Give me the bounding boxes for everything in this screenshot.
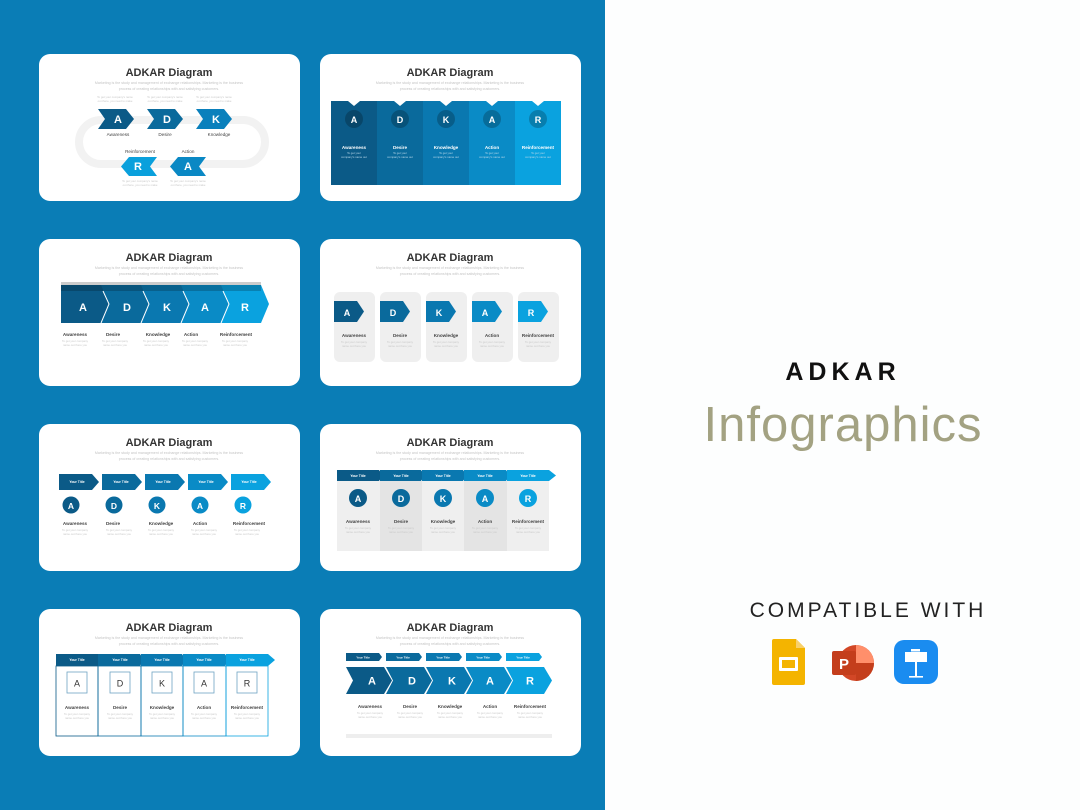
card 5: title arrows with circles: Desire	[106, 521, 120, 526]
card 3: chevron band: D	[123, 302, 131, 314]
card 3: chevron band: To get your company	[182, 339, 209, 343]
card 5: title arrows with circles: A	[197, 501, 203, 511]
card 7: outlined boxes: name out there you	[65, 716, 89, 720]
card 6: header band with gray columns: To get your company	[345, 526, 372, 530]
card 8: big chevrons with title tags: Your Title	[436, 656, 450, 660]
card 4: tiles: ADKAR Diagram	[407, 252, 494, 264]
card 7: outlined boxes: Your Title	[239, 658, 255, 662]
card 6: header band with gray columns: To get your company	[472, 526, 499, 530]
card 4: tiles: name out there you	[526, 344, 550, 348]
card 5: title arrows with circles: R	[240, 501, 246, 511]
card 3: chevron band: To get your company	[62, 339, 89, 343]
card 4: tiles: process of creating relationships with and satisfying customers.	[400, 272, 500, 276]
card 8: big chevrons with title tags	[320, 609, 581, 756]
card 3: chevron band: Knowledge	[146, 332, 171, 337]
card 7: outlined boxes: Awareness	[65, 705, 90, 710]
card 3: chevron band: Awareness	[63, 332, 88, 337]
card 6: header band with gray columns: Knowledge	[431, 519, 456, 524]
card 6: header band with gray columns: name out there you	[346, 530, 370, 534]
card 3: chevron band: To get your company	[143, 339, 170, 343]
card 2: column blocks: company's name out	[479, 155, 505, 159]
card 5: title arrows with circles: name out there you	[107, 532, 131, 536]
card 2: column blocks: process of creating relationships with and satisfying customers.	[400, 87, 500, 91]
card 7: outlined boxes: Knowledge	[150, 705, 175, 710]
card 2: column blocks: ADKAR Diagram	[407, 67, 494, 79]
card 2: column blocks: To get your	[439, 151, 453, 155]
card 8: big chevrons with title tags: Your Title	[356, 656, 370, 660]
card 6: header band with gray columns	[320, 424, 581, 571]
card 4: tiles: name out there you	[388, 344, 412, 348]
card 7: outlined boxes: ADKAR Diagram	[126, 622, 213, 634]
card 2: column blocks: K	[443, 115, 450, 125]
card 8: big chevrons with title tags: name out there you	[398, 715, 422, 719]
card 1: loop diagram: K	[212, 114, 220, 126]
card 6: header band with gray columns: Your Title	[350, 474, 366, 478]
card 1: loop diagram: To get your company's name	[170, 179, 206, 183]
card 3: chevron band: Action	[184, 332, 198, 337]
heading: ADKAR: ADKAR	[785, 358, 901, 386]
card 7: outlined boxes: R	[244, 678, 251, 688]
card 3: chevron band: K	[163, 302, 171, 314]
card 5: title arrows with circles: To get your company	[62, 528, 89, 532]
card 8: big chevrons with title tags: Awareness	[358, 704, 383, 709]
card 5: title arrows with circles: process of creating relationships with and satisfying customers.	[119, 457, 219, 461]
card 6: header band with gray columns: A	[482, 494, 489, 504]
card 5: title arrows with circles	[39, 424, 300, 571]
card 1: loop diagram: out there, you need to make	[98, 99, 133, 103]
card 8: big chevrons with title tags: name out there you	[518, 715, 542, 719]
card 4: tiles: name out there you	[480, 344, 504, 348]
card 4: tiles: Reinforcement	[522, 333, 555, 338]
card 1: loop diagram: D	[163, 114, 171, 126]
icon: google slides	[772, 639, 805, 685]
card 1: loop diagram: out there, you need to make	[197, 99, 232, 103]
card 6: header band with gray columns: name out there you	[516, 530, 540, 534]
card 5: title arrows with circles: To get your company	[191, 528, 218, 532]
card 7: outlined boxes	[39, 609, 300, 756]
card 5: title arrows with circles: Action	[193, 521, 207, 526]
card 1: loop diagram: Awareness	[107, 132, 130, 137]
card 5: title arrows with circles: Knowledge	[149, 521, 174, 526]
card 7: outlined boxes: name out there you	[235, 716, 259, 720]
card 2: column blocks: company's name out	[341, 155, 367, 159]
card 3: chevron band: R	[241, 302, 249, 314]
card 2: column blocks: R	[535, 115, 542, 125]
card 8: big chevrons with title tags: To get your company	[477, 711, 504, 715]
card 3: chevron band: name out there you	[223, 343, 247, 347]
card 7: outlined boxes: Your Title	[69, 658, 85, 662]
card 2: column blocks: Reinforcement	[522, 145, 555, 150]
card 5: title arrows with circles: To get your company	[234, 528, 261, 532]
card 3: chevron band: Desire	[106, 332, 120, 337]
card 4: tiles: Action	[485, 333, 499, 338]
card 7: outlined boxes: Your Title	[196, 658, 212, 662]
card 2: column blocks: To get your	[531, 151, 545, 155]
card 6: header band with gray columns: Awareness	[346, 519, 371, 524]
card 8: big chevrons with title tags: ADKAR Diagram	[407, 622, 494, 634]
card 7: outlined boxes: To get your company	[234, 712, 261, 716]
card 4: tiles: To get your company	[387, 340, 414, 344]
card 3: chevron band: Marketing is the study and management of exchange relationships. Marketing is the business	[95, 266, 243, 270]
card 5: title arrows with circles: Your Title	[198, 480, 214, 484]
card 2: column blocks: Knowledge	[434, 145, 459, 150]
card 4: tiles: To get your company	[433, 340, 460, 344]
card 4: tiles: K	[436, 308, 443, 318]
card 2: column blocks: Desire	[393, 145, 407, 150]
card 7: outlined boxes: To get your company	[107, 712, 134, 716]
card 4: tiles	[320, 239, 581, 386]
card 3: chevron band: Reinforcement	[220, 332, 253, 337]
card 2: column blocks: Awareness	[342, 145, 367, 150]
card 7: outlined boxes: Reinforcement	[231, 705, 264, 710]
card 7: outlined boxes: Desire	[113, 705, 127, 710]
card 8: big chevrons with title tags: To get your company	[397, 711, 424, 715]
card 1: loop diagram	[39, 54, 300, 201]
card 6: header band with gray columns: Desire	[394, 519, 408, 524]
card 2: column blocks: D	[397, 115, 404, 125]
card 5: title arrows with circles: To get your company	[148, 528, 175, 532]
icon: powerpoint	[832, 645, 874, 681]
card 8: big chevrons with title tags: Marketing is the study and management of exchange relationships. Marketing is the business	[376, 636, 524, 640]
card 5: title arrows with circles: Your Title	[113, 480, 129, 484]
card 3: chevron band: To get your company	[222, 339, 249, 343]
card 4: tiles: To get your company	[341, 340, 368, 344]
card 8: big chevrons with title tags: Your Title	[516, 656, 530, 660]
card 8: big chevrons with title tags: Action	[483, 704, 497, 709]
card 5: title arrows with circles: name out there you	[63, 532, 87, 536]
card 8: big chevrons with title tags: To get your company	[437, 711, 464, 715]
card 1: loop diagram: process of creating relationships with and satisfying customers.	[119, 87, 219, 91]
card 6: header band with gray columns: Action	[478, 519, 492, 524]
card 8: big chevrons with title tags: process of creating relationships with and satisfying customers.	[400, 642, 500, 646]
card 1: loop diagram: Action	[182, 149, 195, 154]
card 4: tiles: Awareness	[342, 333, 367, 338]
card 1: loop diagram: To get your company's name	[196, 95, 232, 99]
card 1: loop diagram: out there, you need to make	[148, 99, 183, 103]
card 3: chevron band: To get your company	[102, 339, 129, 343]
card 7: outlined boxes: process of creating relationships with and satisfying customers.	[119, 642, 219, 646]
card 8: big chevrons with title tags: K	[448, 676, 456, 688]
card 7: outlined boxes: Action	[197, 705, 211, 710]
card 6: header band with gray columns: name out there you	[431, 530, 455, 534]
card 5: title arrows with circles: ADKAR Diagram	[126, 437, 213, 449]
card 4: tiles: name out there you	[342, 344, 366, 348]
card 1: loop diagram: R	[134, 161, 142, 173]
card 7: outlined boxes: name out there you	[108, 716, 132, 720]
card 1: loop diagram: To get your company's name	[97, 95, 133, 99]
heading: Infographics: Infographics	[704, 398, 982, 452]
card 1: loop diagram: Knowledge	[208, 132, 231, 137]
card 6: header band with gray columns: To get your company	[515, 526, 542, 530]
panel: blue background	[0, 0, 605, 810]
card 6: header band with gray columns: name out there you	[473, 530, 497, 534]
card 1: loop diagram: ADKAR Diagram	[126, 67, 213, 79]
card 2: column blocks: Marketing is the study and management of exchange relationships. Marketing is the business	[376, 81, 524, 85]
card 6: header band with gray columns: name out there you	[389, 530, 413, 534]
card 8: big chevrons with title tags: Desire	[403, 704, 417, 709]
card 7: outlined boxes: name out there you	[150, 716, 174, 720]
card 2: column blocks: To get your	[347, 151, 361, 155]
card 3: chevron band: A	[201, 302, 209, 314]
card 2: column blocks: A	[351, 115, 358, 125]
card 6: header band with gray columns: process of creating relationships with and satisfying customers.	[400, 457, 500, 461]
card 5: title arrows with circles: name out there you	[192, 532, 216, 536]
card 7: outlined boxes: To get your company	[191, 712, 218, 716]
card 6: header band with gray columns: A	[355, 494, 362, 504]
card 4: tiles: Knowledge	[434, 333, 459, 338]
card 5: title arrows with circles: Reinforcement	[233, 521, 266, 526]
card 8: big chevrons with title tags: Your Title	[476, 656, 490, 660]
card 4: tiles: To get your company	[479, 340, 506, 344]
card 7: outlined boxes: K	[159, 678, 165, 688]
card 7: outlined boxes: A	[74, 678, 80, 688]
card 6: header band with gray columns: Reinforcement	[512, 519, 545, 524]
card 2: column blocks: A	[489, 115, 496, 125]
icon: powerpoint: P	[839, 656, 849, 673]
card 8: big chevrons with title tags: A	[486, 676, 494, 688]
card 3: chevron band: name out there you	[183, 343, 207, 347]
card 5: title arrows with circles: Your Title	[155, 480, 171, 484]
card 6: header band with gray columns: Marketing is the study and management of exchange relationships. Marketing is the business	[376, 451, 524, 455]
card 8: big chevrons with title tags: R	[526, 676, 534, 688]
card 8: big chevrons with title tags: To get your company	[357, 711, 384, 715]
card 3: chevron band: ADKAR Diagram	[126, 252, 213, 264]
card 4: tiles: To get your company	[525, 340, 552, 344]
card 7: outlined boxes: To get your company	[64, 712, 91, 716]
card 2: column blocks	[320, 54, 581, 201]
card 3: chevron band: name out there you	[144, 343, 168, 347]
card 2: column blocks: To get your	[485, 151, 499, 155]
card 5: title arrows with circles: K	[154, 501, 161, 511]
card 2: column blocks: To get your	[393, 151, 407, 155]
card 1: loop diagram: A	[184, 161, 192, 173]
card 7: outlined boxes: Your Title	[112, 658, 128, 662]
text: compatible with: COMPATIBLE WITH	[750, 599, 986, 622]
card 4: tiles: Marketing is the study and management of exchange relationships. Marketing is the business	[376, 266, 524, 270]
card 1: loop diagram: Desire	[158, 132, 172, 137]
card 8: big chevrons with title tags: name out there you	[358, 715, 382, 719]
card 2: column blocks: company's name out	[433, 155, 459, 159]
card 4: tiles: A	[344, 308, 351, 318]
card 6: header band with gray columns: Your Title	[477, 474, 493, 478]
card 4: tiles: R	[528, 308, 535, 318]
card 7: outlined boxes: To get your company	[149, 712, 176, 716]
card 3: chevron band	[39, 239, 300, 386]
card 3: chevron band: name out there you	[63, 343, 87, 347]
card 2: column blocks: Action	[485, 145, 499, 150]
card 7: outlined boxes: name out there you	[192, 716, 216, 720]
card 1: loop diagram: Marketing is the study and management of exchange relationships. Marketing is the business	[95, 81, 243, 85]
card 4: tiles: Desire	[393, 333, 407, 338]
card 4: tiles: name out there you	[434, 344, 458, 348]
card 5: title arrows with circles: Your Title	[69, 480, 85, 484]
card 6: header band with gray columns: D	[398, 494, 405, 504]
card 7: outlined boxes: D	[117, 678, 124, 688]
card 3: chevron band: process of creating relationships with and satisfying customers.	[119, 272, 219, 276]
card 1: loop diagram: Reinforcement	[125, 149, 156, 154]
card 7: outlined boxes: Marketing is the study and management of exchange relationships. Marketing is the business	[95, 636, 243, 640]
card 4: tiles: A	[482, 308, 489, 318]
card 8: big chevrons with title tags: A	[368, 676, 376, 688]
icon: keynote	[894, 640, 938, 684]
card 3: chevron band: A	[79, 302, 87, 314]
card 2: column blocks: company's name out	[525, 155, 551, 159]
card 5: title arrows with circles: D	[111, 501, 117, 511]
card 8: big chevrons with title tags: name out there you	[438, 715, 462, 719]
card 1: loop diagram: out there, you need to make	[123, 183, 158, 187]
card 5: title arrows with circles: name out there you	[149, 532, 173, 536]
card 6: header band with gray columns: ADKAR Diagram	[407, 437, 494, 449]
card 6: header band with gray columns: R	[525, 494, 532, 504]
card 1: loop diagram: out there, you need to make	[171, 183, 206, 187]
card 6: header band with gray columns: To get your company	[430, 526, 457, 530]
card 7: outlined boxes: A	[201, 678, 207, 688]
card 6: header band with gray columns: Your Title	[520, 474, 536, 478]
card 6: header band with gray columns: K	[440, 494, 447, 504]
card 8: big chevrons with title tags: Your Title	[396, 656, 410, 660]
card 5: title arrows with circles: name out there you	[235, 532, 259, 536]
card 6: header band with gray columns: Your Title	[393, 474, 409, 478]
card 1: loop diagram: To get your company's name	[122, 179, 158, 183]
card 5: title arrows with circles: Your Title	[241, 480, 257, 484]
card 5: title arrows with circles: Marketing is the study and management of exchange relationships. Marketing is the business	[95, 451, 243, 455]
card 2: column blocks: company's name out	[387, 155, 413, 159]
card 8: big chevrons with title tags: Knowledge	[438, 704, 463, 709]
card 5: title arrows with circles: A	[68, 501, 74, 511]
card 6: header band with gray columns: To get your company	[388, 526, 415, 530]
card 6: header band with gray columns: Your Title	[435, 474, 451, 478]
card 7: outlined boxes: Your Title	[154, 658, 170, 662]
card 5: title arrows with circles: Awareness	[63, 521, 88, 526]
card 8: big chevrons with title tags: Reinforcement	[514, 704, 547, 709]
card 8: big chevrons with title tags: D	[408, 676, 416, 688]
card 8: big chevrons with title tags: name out there you	[478, 715, 502, 719]
card 5: title arrows with circles: To get your company	[106, 528, 133, 532]
card 1: loop diagram: To get your company's name	[147, 95, 183, 99]
card 4: tiles: D	[390, 308, 397, 318]
card 8: big chevrons with title tags: To get your company	[517, 711, 544, 715]
card 3: chevron band: name out there you	[103, 343, 127, 347]
card 1: loop diagram: A	[114, 114, 122, 126]
